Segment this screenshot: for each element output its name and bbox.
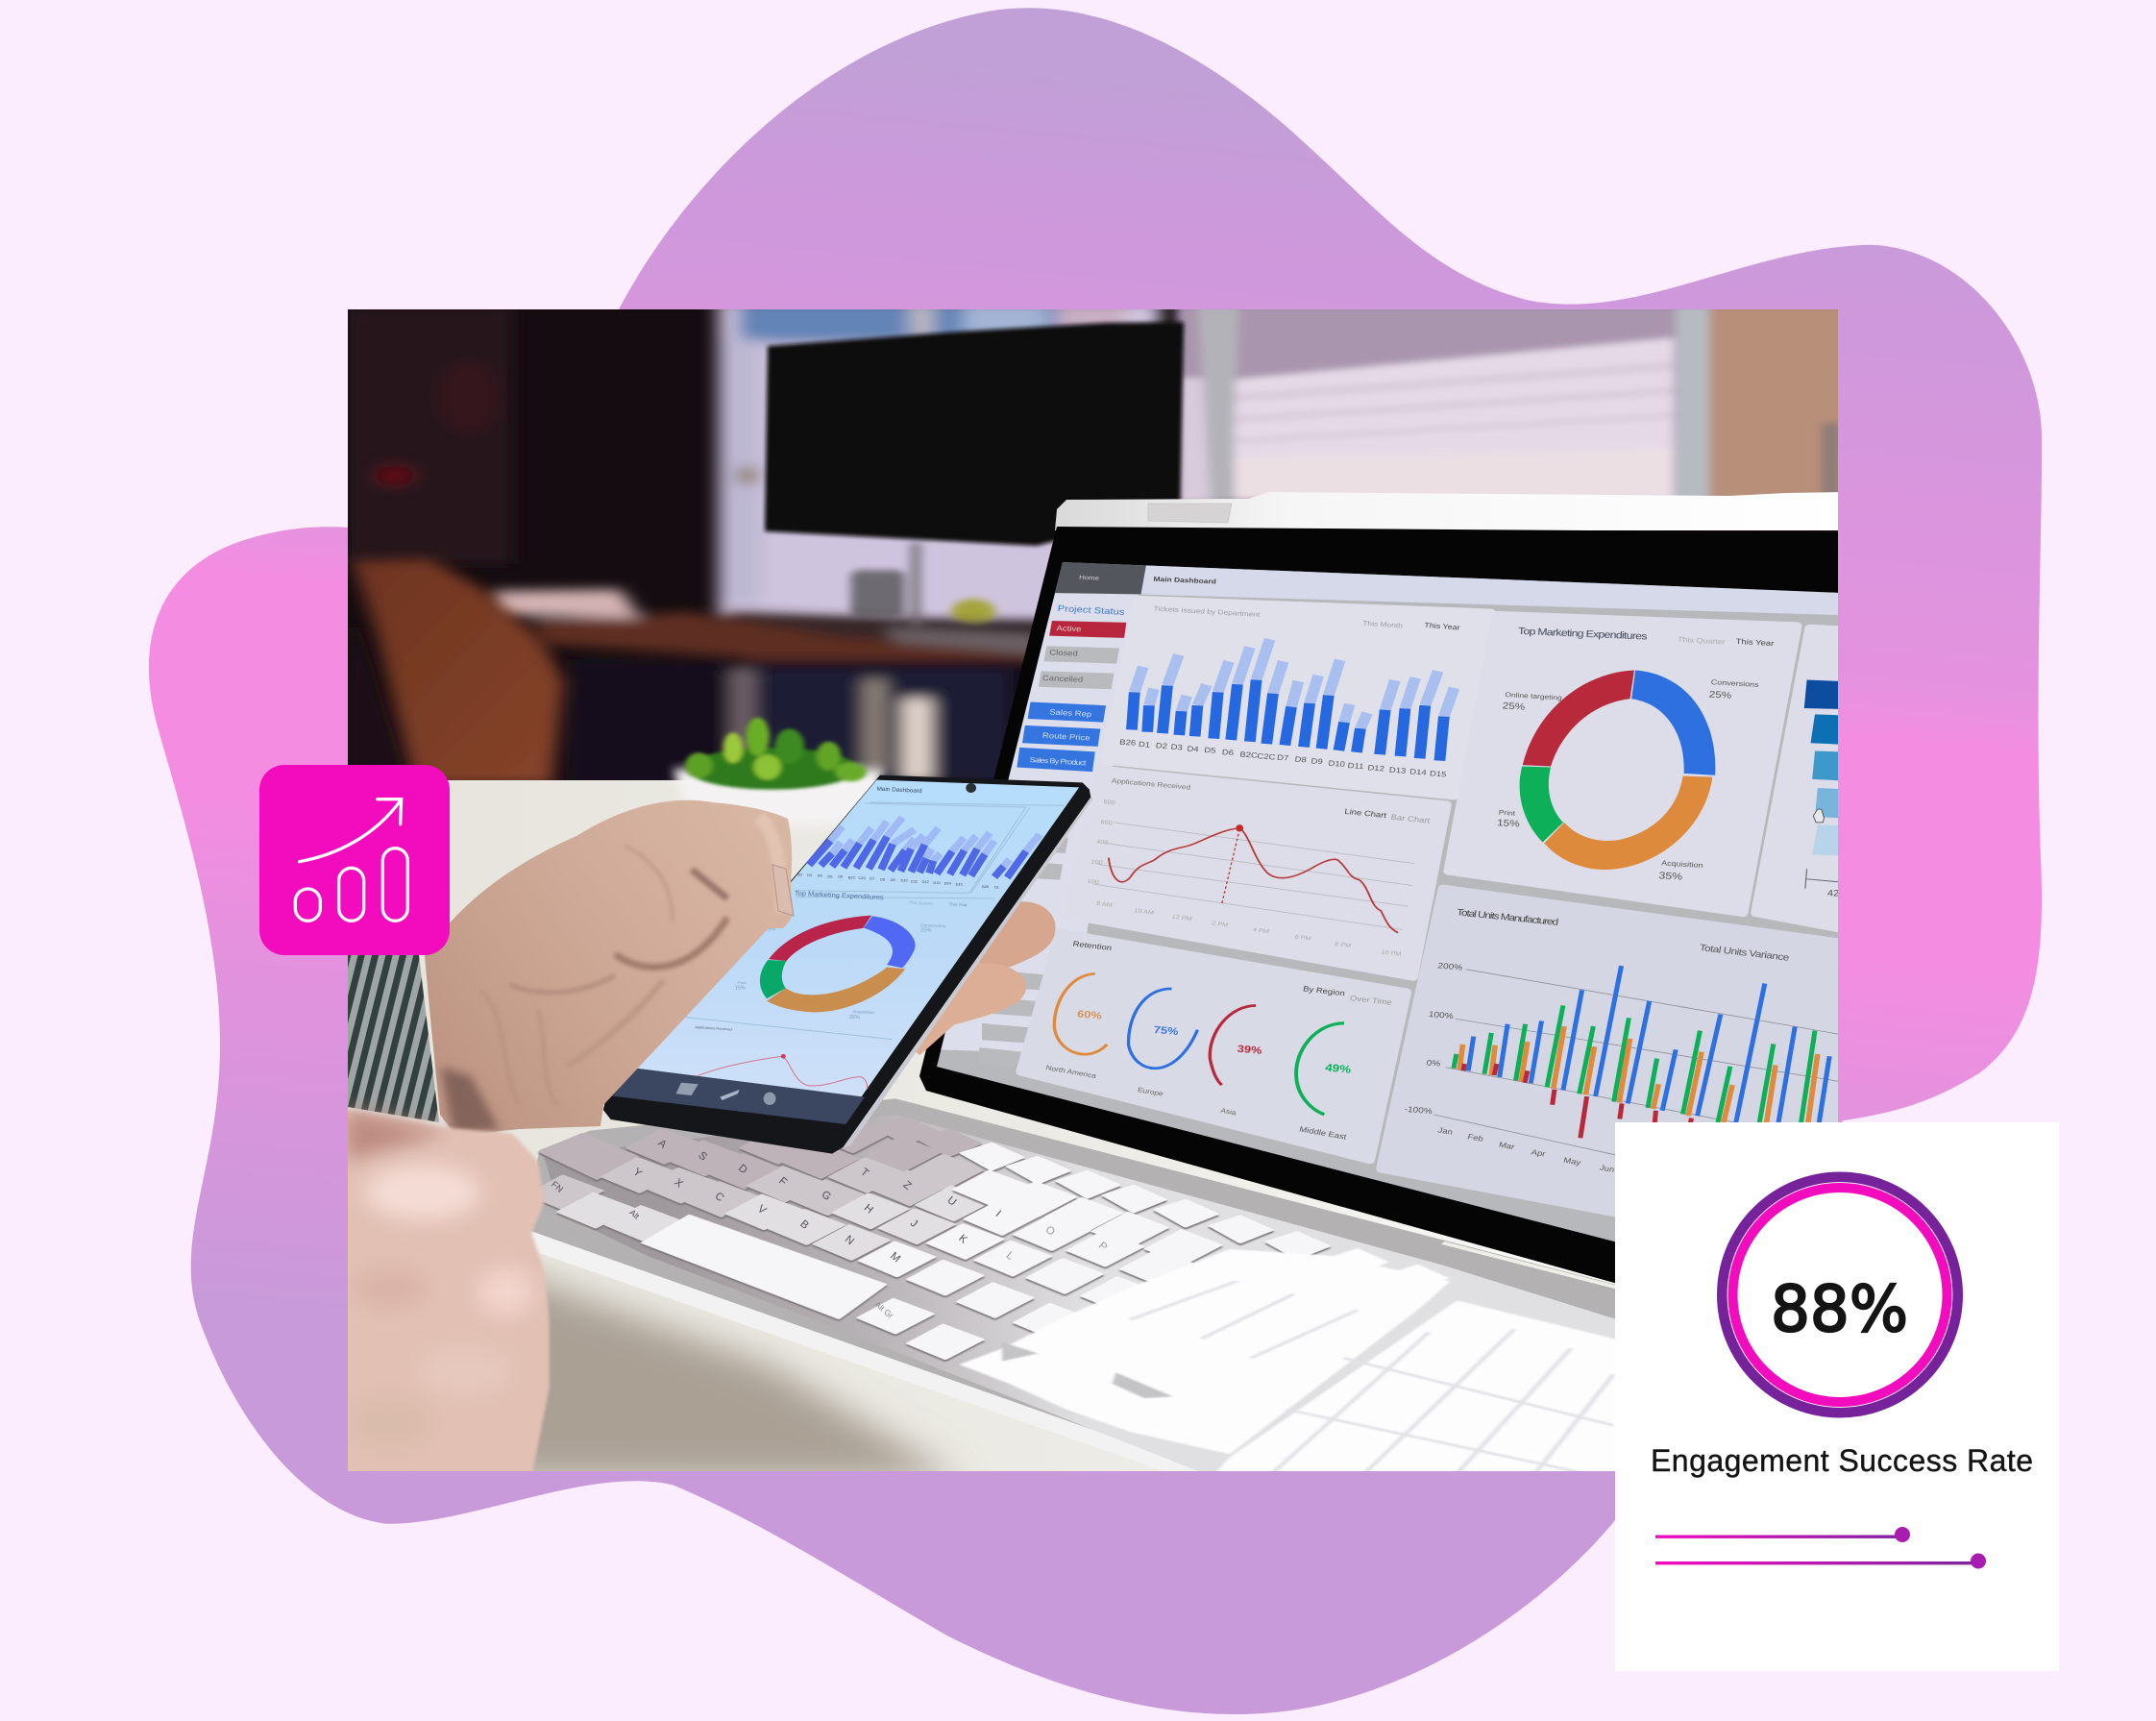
arc: North America 60%: North America (1045, 1064, 1098, 1080)
month labels: Feb (1467, 1132, 1484, 1143)
light grey keys (558, 1187, 991, 1260)
month labels: Mar (1498, 1140, 1516, 1151)
panel: retention by region: Retention (1072, 939, 1113, 952)
sidebar: Active (1056, 624, 1082, 633)
panel: top marketing expenditures donut (1448, 615, 1797, 913)
smartphone (603, 775, 1092, 1154)
time and value axis labels: 10 PM (1381, 949, 1402, 958)
thumbnail (772, 865, 794, 916)
panel: applications line chart: Bar Chart (1390, 813, 1431, 825)
key legends: X (672, 1176, 685, 1191)
month labels: May (1562, 1155, 1582, 1167)
striped shirt sleeve (348, 955, 439, 1122)
phone donut (760, 916, 916, 1012)
phone axis labels: D11 (911, 879, 918, 883)
percentage: 88% (1771, 1272, 1908, 1346)
y axis labels: -100% (1404, 1105, 1433, 1116)
y axis labels: 100% (1428, 1010, 1454, 1020)
key legends: Alt (627, 1208, 642, 1221)
time and value axis labels: 10 AM (1134, 908, 1154, 917)
phone axis labels (797, 873, 999, 890)
fingers behind phone (899, 901, 1056, 1055)
donut labels: 35% (1658, 871, 1683, 882)
time and value axis labels: 800 (1103, 799, 1115, 806)
bar labels: D9 (1311, 756, 1323, 766)
panel: tickets bar chart: This Month (1362, 619, 1403, 629)
blurred office background, left (346, 301, 1160, 788)
keyboard (519, 1098, 1628, 1477)
key legends: N (843, 1234, 856, 1247)
space bar (643, 1216, 885, 1318)
time and value axis labels: 600 (1100, 820, 1113, 826)
donut labels (1497, 678, 1759, 882)
icon: growth chart badge (259, 765, 450, 955)
sidebar (939, 562, 1146, 1068)
sidebar header (1055, 562, 1146, 594)
far edge highlight (1443, 1242, 1628, 1291)
time and value axis labels: 12 PM (1171, 914, 1192, 922)
red trend line (1109, 828, 1398, 933)
blue bars (1468, 966, 1829, 1139)
phone bars (809, 818, 1040, 877)
grid lines (1433, 970, 1839, 1156)
smartphone: Main Dashboard (876, 786, 922, 795)
key legends: S (697, 1149, 709, 1164)
donut labels: Online targeting (1505, 691, 1562, 701)
phone axis labels: D6 (838, 875, 843, 879)
phone axis labels: B2C (848, 875, 856, 879)
bar labels: D12 (1367, 763, 1385, 773)
bar labels: D7 (1277, 753, 1289, 762)
panel: retention by region: Over Time (1349, 994, 1393, 1007)
dark bars (1132, 680, 1444, 761)
arc: Europe 75% (1129, 989, 1197, 1097)
grid lines (1094, 823, 1414, 929)
phone axis labels: D12 (922, 880, 929, 884)
time and value axis labels: 8 PM (1335, 942, 1352, 949)
bar labels: D10 (1328, 759, 1346, 769)
phone axis labels: D10 (900, 879, 908, 883)
dashboard photo (346, 301, 1850, 1482)
laptop (919, 492, 1850, 1347)
arc: Middle East 49% (1296, 1023, 1352, 1142)
phone body (603, 775, 1091, 1154)
phone donut labels: Acquisition (852, 1009, 875, 1015)
black bezel (919, 527, 1845, 1347)
panel: total units manufactured chart (1381, 889, 1850, 1257)
time and value axis labels: 4 PM (1252, 927, 1269, 935)
bar labels: D6 (1221, 748, 1235, 757)
phone camera (966, 783, 976, 793)
key legends: B (797, 1218, 811, 1232)
phone axis labels: C2C (859, 876, 867, 880)
panel: applications line chart (1067, 770, 1447, 977)
key well behind keycaps (544, 1115, 1628, 1477)
month labels (1437, 1125, 1616, 1174)
phone axis labels: B26 (982, 885, 989, 889)
red bars (1463, 1064, 1691, 1138)
phone axis labels: D9 (891, 878, 895, 882)
y axis labels: 0% (1426, 1058, 1441, 1068)
slider one (1655, 1527, 1910, 1542)
phone line chart (695, 1025, 868, 1089)
key legends: L (1004, 1249, 1016, 1263)
time and value axis labels: 200 (1090, 859, 1103, 867)
panel: applications line chart: Applications Received (1111, 776, 1191, 791)
blurred white plant pot (673, 769, 884, 826)
table shadow (500, 1268, 961, 1480)
key legends: U (944, 1194, 958, 1209)
arc: North America 60% (1045, 973, 1107, 1080)
sidebar: Sales By Product (1029, 756, 1087, 767)
arc: Europe 75%: Europe (1137, 1086, 1164, 1097)
key legends: D (736, 1163, 749, 1176)
key legends: O (1043, 1224, 1057, 1239)
mid grey keys (528, 1155, 982, 1217)
arrow curve (300, 799, 402, 862)
phone axis labels: D1 (994, 886, 999, 890)
background monitor (765, 322, 1184, 546)
panel: applications line chart: Line Chart (1344, 807, 1387, 820)
bar labels: D15 (1430, 769, 1447, 778)
time and value axis labels: 2 PM (1212, 921, 1229, 928)
arc: Europe 75%: 75% (1153, 1024, 1180, 1038)
green bars (1454, 1005, 1815, 1138)
phone line chart: Applications Received (695, 1025, 732, 1031)
slider two (1655, 1553, 1986, 1568)
arc: Asia 39% (1210, 1005, 1263, 1117)
bar labels: D4 (1187, 744, 1199, 753)
sidebar: Home (1079, 574, 1099, 582)
bar labels: D8 (1294, 754, 1308, 764)
phone donut labels: Print (738, 980, 747, 985)
y axis labels: 200% (1437, 961, 1463, 971)
white table top (348, 780, 1615, 1471)
phone donut labels: 25% (765, 927, 776, 933)
sidebar: Route Price (1042, 731, 1090, 742)
bar labels: D14 (1409, 767, 1427, 776)
three rounded bars (295, 848, 407, 921)
panel: retention by region (1020, 933, 1407, 1160)
time and value axis labels (1087, 799, 1402, 958)
time and value axis labels: 6 PM (1294, 934, 1311, 943)
key legends: C (713, 1191, 725, 1204)
key legends: G (819, 1189, 833, 1203)
key legends: M (888, 1250, 902, 1265)
key legends: F (776, 1175, 789, 1189)
arc: Middle East 49%: 49% (1325, 1062, 1352, 1075)
card label: Engagement Success Rate (1651, 1443, 2033, 1478)
bar labels: D11 (1347, 761, 1364, 771)
panel: funnel at right edge (1755, 628, 1850, 930)
blurred white key block, right side (960, 1248, 1628, 1477)
bar labels: D3 (1170, 743, 1183, 751)
bar labels: D5 (1204, 746, 1216, 755)
panel: tickets bar chart (1106, 600, 1491, 796)
screen contents (939, 562, 1850, 1257)
time and value axis labels: 100 (1087, 878, 1099, 886)
y axis labels (1404, 961, 1463, 1116)
phone axis labels: D14 (944, 882, 951, 886)
sidebar: Sales Rep (1049, 707, 1092, 719)
key legends (550, 1138, 1109, 1320)
bar labels: C2C (1257, 751, 1276, 761)
key legends: H (862, 1202, 875, 1217)
key legends: T (858, 1167, 870, 1179)
blurred foreground fist (346, 1110, 550, 1477)
bar labels: B2C (1239, 750, 1258, 760)
grey key block (540, 1118, 980, 1189)
laptop screen (937, 562, 1845, 1301)
arc: Asia 39%: 39% (1237, 1044, 1263, 1057)
bar labels: D2 (1155, 741, 1168, 750)
panel: tickets bar chart: This Year (1424, 622, 1460, 631)
laptop lid edge (1055, 492, 1845, 530)
lid hinge piece (1148, 504, 1232, 523)
arc: Asia 39%: Asia (1220, 1106, 1237, 1117)
main header bar: Main Dashboard (1153, 575, 1216, 585)
bar labels: D13 (1388, 765, 1407, 775)
holding hand (425, 800, 794, 1136)
time and value axis labels: 8 AM (1096, 900, 1113, 909)
phone axis labels: D7 (870, 877, 874, 881)
month labels: Jan (1437, 1125, 1454, 1137)
phone screen (635, 780, 1079, 1097)
panel: total units manufactured chart: Total Units Manufactured (1456, 907, 1559, 928)
month labels: Jun (1599, 1163, 1616, 1174)
light bars (1135, 639, 1455, 728)
wrist shadow (440, 1067, 500, 1134)
donut labels: Acquisition (1661, 859, 1703, 870)
arc: North America 60%: 60% (1076, 1008, 1103, 1021)
donut labels: 15% (1497, 818, 1521, 829)
key legends: Z (901, 1179, 914, 1192)
key legends: J (908, 1217, 919, 1230)
progress ring (1722, 1177, 1958, 1413)
phone axis labels: D2 (797, 873, 802, 877)
white key block (643, 1143, 1329, 1359)
phone axis labels: D5 (827, 874, 832, 878)
sidebar: Cancelled (1042, 674, 1084, 684)
phone donut labels: 25% (920, 927, 932, 933)
bar labels: B26 (1119, 737, 1137, 748)
blurred office background, right with blinds (1177, 305, 1848, 503)
panel: top marketing expenditures donut: This Year (1735, 637, 1775, 648)
donut labels: 25% (1708, 689, 1732, 701)
panel: total units manufactured chart: Total Units Variance (1699, 943, 1790, 963)
phone axis labels: D15 (956, 882, 963, 886)
main header bar (1140, 564, 1839, 615)
donut labels: Print (1498, 808, 1516, 817)
time and value axis labels: 400 (1096, 839, 1109, 846)
key legends: FN (550, 1179, 565, 1194)
key legends: K (956, 1233, 969, 1246)
phone donut labels: 15% (735, 985, 746, 991)
panel: retention by region: By Region (1303, 984, 1346, 997)
panel: top marketing expenditures donut: This Quarter (1678, 635, 1726, 646)
key legends: V (755, 1203, 769, 1217)
arc: Middle East 49%: Middle East (1298, 1124, 1348, 1142)
phone nav icons (676, 1083, 775, 1105)
bar labels (1119, 737, 1447, 778)
phone panel lines (683, 802, 1064, 1040)
status red button (1049, 621, 1126, 638)
month labels: Apr (1531, 1147, 1547, 1158)
donut labels: Conversions (1711, 678, 1759, 689)
key legends: Alt Gr (873, 1299, 895, 1320)
panel: top marketing expenditures donut: Top Marketing Expenditures (1518, 627, 1648, 642)
phone donut labels: Conversions (920, 922, 946, 928)
phone axis labels: D8 (880, 877, 885, 881)
panel: funnel at right edge: 42 (1827, 889, 1840, 898)
sidebar: Project Status (1057, 604, 1125, 618)
phone axis labels: D13 (933, 881, 941, 885)
smartphone: This Year (948, 901, 968, 907)
donut labels: 25% (1502, 701, 1526, 712)
hand shading (480, 817, 782, 1105)
phone donut labels (735, 922, 946, 1020)
brown chair (352, 559, 564, 785)
donut segments (1520, 670, 1715, 870)
blurred cut-outs and gaps between keys (1002, 1281, 1613, 1473)
phone axis labels: D4 (818, 874, 822, 878)
keyboard front rim (519, 1227, 1215, 1477)
panel: tickets bar chart: Tickets Issued by Department (1153, 604, 1262, 619)
phone donut labels: 35% (849, 1015, 860, 1020)
smartphone: Top Marketing Expenditures (795, 889, 884, 901)
green plant (685, 718, 867, 790)
sidebar: Closed (1049, 648, 1078, 657)
key legends: P (1096, 1240, 1109, 1253)
orange bars (1459, 1026, 1818, 1139)
bar labels: D1 (1138, 740, 1151, 750)
smartphone: This Quarter (909, 900, 934, 906)
blue buttons (1028, 702, 1106, 723)
card: engagement success rate (1615, 1122, 2059, 1671)
key legends: Y (630, 1167, 644, 1180)
phone axis labels: D3 (807, 873, 812, 877)
key legends: I (993, 1209, 1003, 1219)
keyboard base (519, 1098, 1628, 1477)
phone nav bar (612, 1069, 865, 1124)
key legends: A (655, 1138, 669, 1151)
